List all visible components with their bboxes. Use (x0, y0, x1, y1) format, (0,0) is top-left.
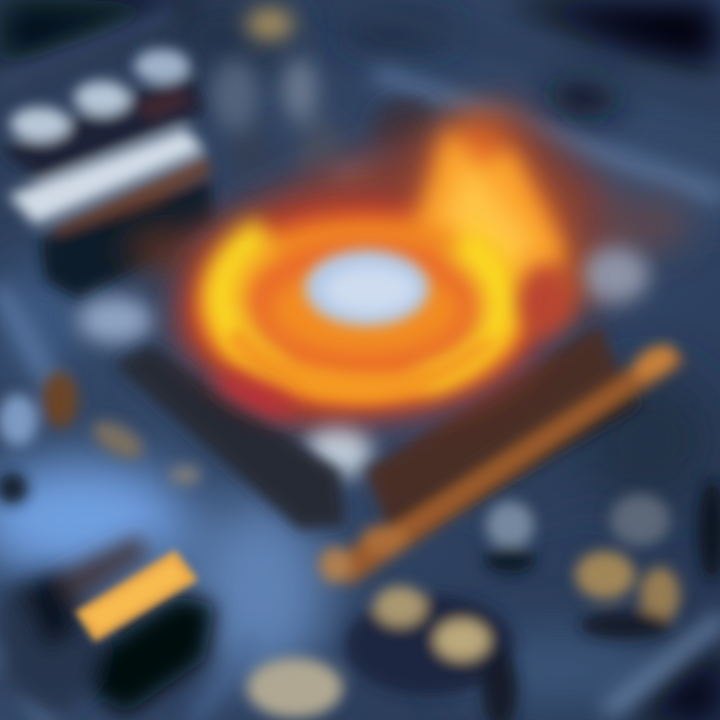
lower red glow (209, 266, 571, 426)
processor die centre (305, 250, 429, 326)
flame (185, 115, 570, 415)
light chip top surface (77, 247, 649, 478)
small capacitors left (0, 372, 201, 504)
white memory bars top left (0, 49, 215, 300)
burning ring around processor die (207, 218, 523, 402)
lower-left orange chip (0, 535, 215, 720)
chip right brown side (365, 325, 640, 545)
chip front-left dark side (115, 345, 345, 530)
beige components bottom (247, 480, 720, 720)
heat glow on board (128, 100, 690, 430)
orange strip right edge (319, 338, 685, 585)
tall parts top middle (211, 8, 437, 206)
